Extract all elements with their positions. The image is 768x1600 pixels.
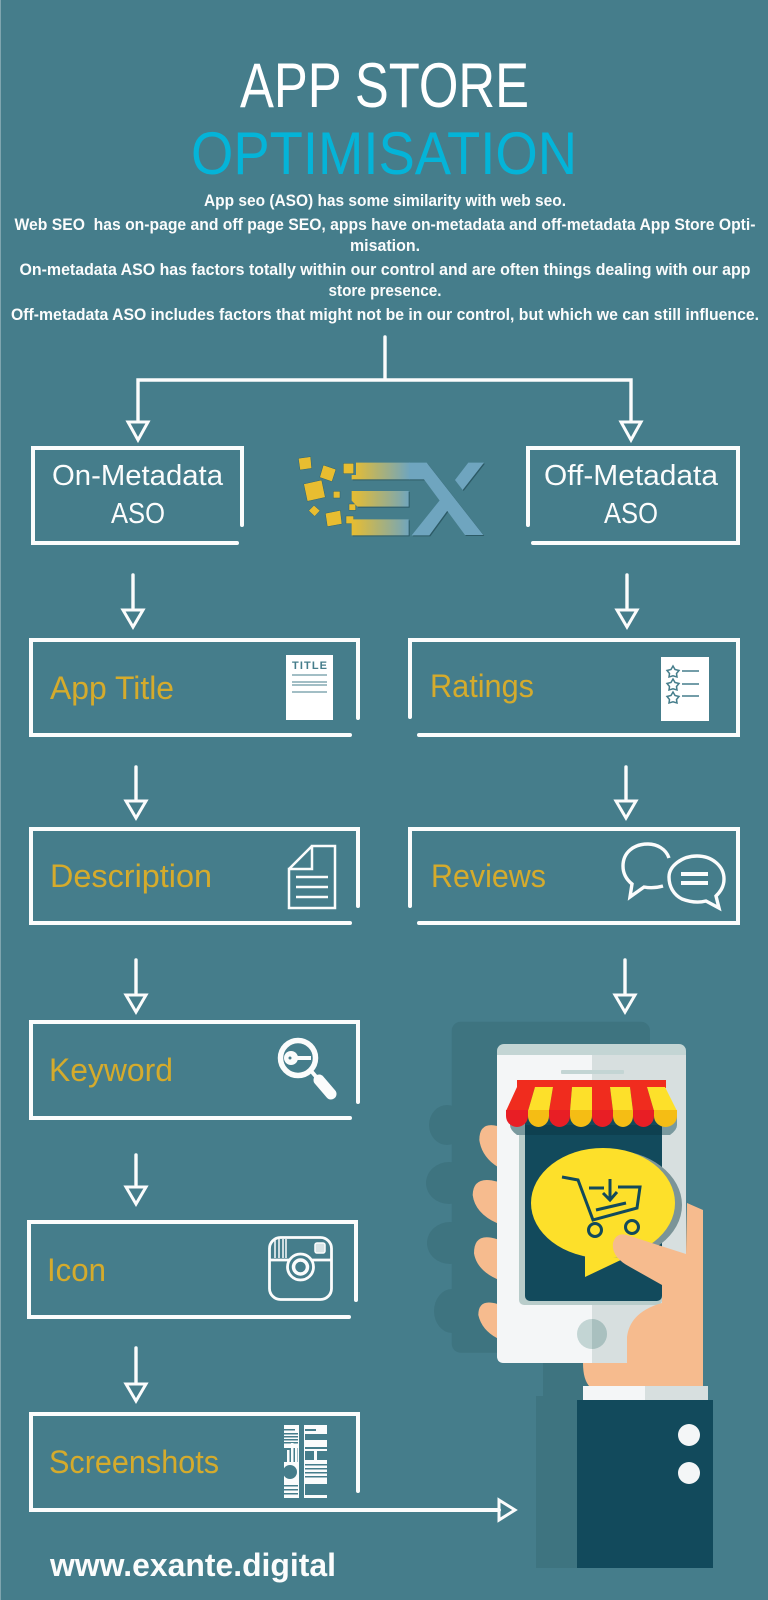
arrow: to phone [615, 960, 635, 1012]
footer url: www.exante.digital [49, 1547, 336, 1583]
icon: speech bubbles [623, 844, 724, 908]
panel: Description [31, 829, 358, 923]
panel: Off-Metadata ASO: Off-Metadata [544, 460, 719, 492]
intro text [11, 191, 759, 324]
intro text: App seo (ASO) has some similarity with web seo. [204, 191, 566, 210]
panel: Description: Description [50, 858, 212, 894]
title [191, 51, 577, 187]
arrow: to Icon [126, 1155, 146, 1204]
panel: On-Metadata ASO [33, 448, 242, 543]
icon: title page [286, 655, 333, 720]
title: APP STORE [240, 51, 529, 121]
panel: Icon [29, 1222, 356, 1317]
shirt cuff [583, 1386, 708, 1400]
panel: Off-Metadata ASO: ASO [604, 498, 658, 530]
panel: Ratings: Ratings [430, 668, 534, 704]
illustration shadow [426, 1022, 650, 1568]
intro text: store presence. [328, 281, 442, 300]
panel: Icon: Icon [47, 1252, 106, 1288]
speech bubble [531, 1148, 682, 1277]
icon: camera [270, 1238, 332, 1300]
panel: Ratings [410, 640, 738, 735]
icon: star rating list [661, 657, 709, 721]
home button [577, 1319, 607, 1349]
arrow: to Keyword [126, 960, 146, 1012]
icon: EX logo [298, 457, 485, 536]
panel: Reviews [410, 829, 738, 923]
fingers [473, 1125, 497, 1338]
panel: App Title: App Title [50, 670, 174, 706]
arrow: to Reviews [616, 767, 636, 818]
title: OPTIMISATION [191, 120, 577, 187]
arrow: to Screenshots [126, 1348, 146, 1401]
arrow: to Description [126, 767, 146, 818]
icon: magnifier with key [280, 1040, 331, 1094]
panel: Keyword: Keyword [49, 1052, 173, 1088]
panel: Keyword [31, 1022, 358, 1118]
panel: Reviews: Reviews [431, 858, 546, 894]
jacket sleeve [577, 1400, 713, 1568]
icon: document [289, 846, 335, 908]
icon: shopping cart [562, 1177, 640, 1236]
panel: On-Metadata ASO: On-Metadata [52, 460, 224, 492]
phone screen [519, 1085, 662, 1305]
illustration: hand holding phone with shop [426, 1022, 713, 1568]
panel: On-Metadata ASO: ASO [111, 498, 165, 530]
hand palm and thumb [583, 1203, 703, 1387]
intro text: misation. [350, 236, 420, 255]
awning [506, 1080, 677, 1135]
phone body [497, 1044, 686, 1363]
panel: App Title [31, 640, 358, 735]
icon: title page: TITLE [292, 660, 327, 672]
arrow: to Ratings [617, 575, 637, 627]
panel: Screenshots [31, 1414, 515, 1520]
panel: Screenshots: Screenshots [49, 1444, 219, 1480]
arrow: split into two branches [128, 337, 641, 440]
arrow: to App Title [123, 575, 143, 627]
icon: screenshot page [283, 1425, 327, 1498]
panel: Off-Metadata ASO [528, 448, 738, 543]
